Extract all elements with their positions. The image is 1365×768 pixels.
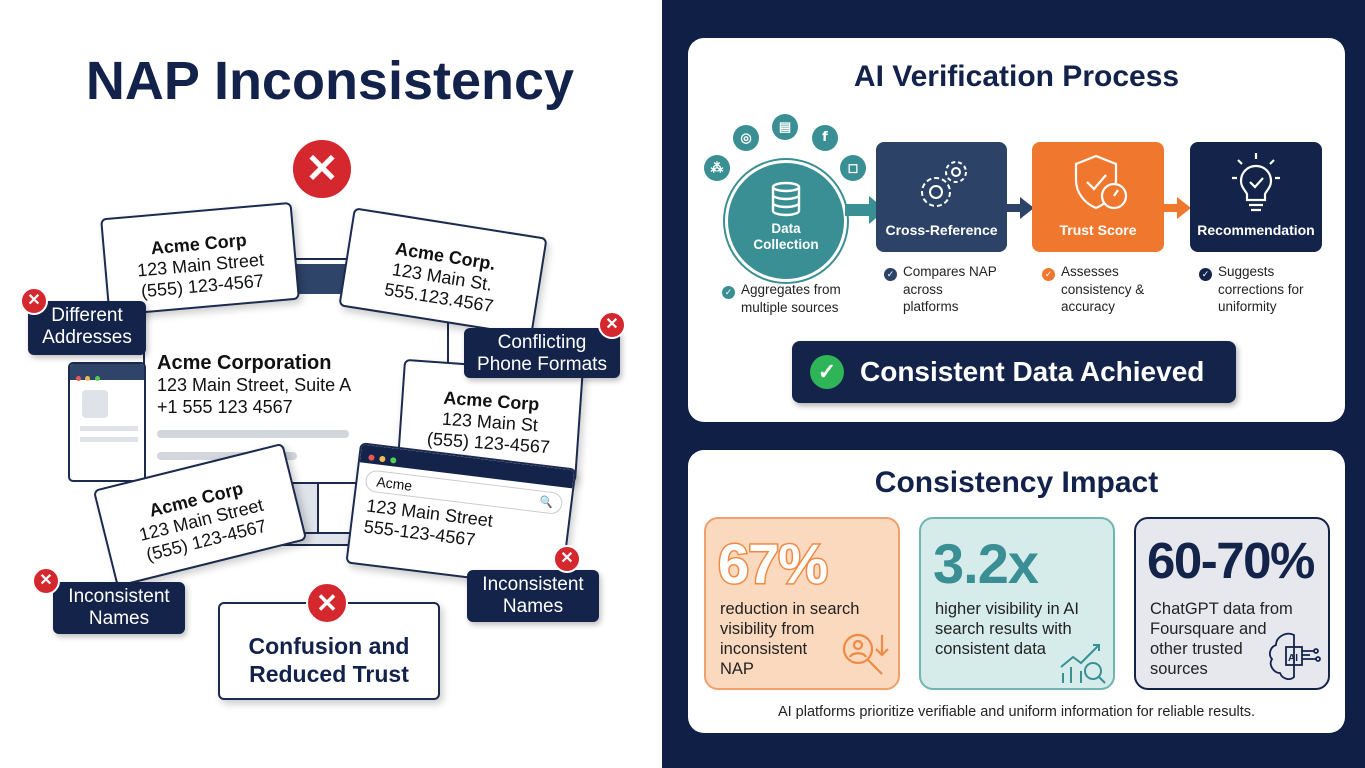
text: ✓ xyxy=(1045,269,1052,279)
text: platforms xyxy=(903,299,959,314)
text: Compares NAP xyxy=(903,264,997,279)
text: main listing in monitor xyxy=(157,352,351,460)
stat: 60-70%: AI xyxy=(1288,653,1298,664)
card: search browser: 555-123-4567 xyxy=(363,516,477,550)
card: Acme Corp mid-right: 123 Main St xyxy=(441,409,539,435)
stat: 60-70%: 60-70% xyxy=(1147,532,1314,589)
text: step bullets: multiple sources xyxy=(741,300,839,315)
text: accuracy xyxy=(1061,299,1115,314)
callout: Confusion and Reduced Trust: Confusion and xyxy=(248,633,409,659)
icon: source icons xyxy=(704,114,866,181)
icon: source icons: ◎ xyxy=(740,130,752,145)
card: search browser: 123 Main Street xyxy=(365,495,494,531)
label: Inconsistent Names left: Inconsistent xyxy=(68,586,170,607)
text: uniformity xyxy=(1218,299,1277,314)
card: Acme Corp. top-right: 123 Main St. xyxy=(391,259,494,295)
label: Inconsistent Names right xyxy=(467,570,599,622)
icon: red x right names xyxy=(553,545,581,573)
card: Acme Corp mid-right xyxy=(396,359,584,483)
banner: Consistent Data Achieved xyxy=(792,341,1236,403)
card: Acme Corp top-left: (555) 123-4567 xyxy=(140,271,265,301)
text: ✓ xyxy=(1202,269,1209,279)
arrow: teal xyxy=(845,196,876,224)
card: Acme Corp top-left xyxy=(100,202,300,316)
stat: 3.2x xyxy=(919,517,1115,690)
step: Data Collection: Data xyxy=(771,221,801,236)
text: ✓ xyxy=(887,269,894,279)
banner: Consistent Data Achieved: Consistent Data Achieved xyxy=(860,356,1204,387)
left browser window xyxy=(68,362,146,482)
card: Acme Corp bottom-left: 123 Main Street xyxy=(137,495,265,545)
stat: 67%: inconsistent xyxy=(720,640,807,658)
text: main listing in monitor: Acme Corporation xyxy=(157,352,331,374)
title: NAP Inconsistency: NAP Inconsistency xyxy=(86,51,574,111)
icon: source icons: ⁂ xyxy=(710,160,724,175)
card: Acme Corp top-left: 123 Main Street xyxy=(136,249,265,280)
icon: source icons: f xyxy=(822,130,828,145)
text: Suggests xyxy=(1218,264,1274,279)
heading: Consistency Impact: Consistency Impact xyxy=(875,466,1158,499)
stat: 3.2x: consistent data xyxy=(935,640,1046,658)
icon: red x Different Addresses xyxy=(20,287,48,315)
label: Different Addresses: Different xyxy=(51,305,123,326)
callout: Confusion and Reduced Trust xyxy=(218,602,440,700)
label: Conflicting Phone Formats xyxy=(464,328,620,378)
icon: top red x xyxy=(291,138,353,200)
icon: source icons: ◻ xyxy=(848,160,858,175)
text: main listing in monitor: +1 555 123 4567 xyxy=(157,397,293,417)
arrow: dark xyxy=(1007,197,1032,219)
label: Inconsistent Names left: Names xyxy=(89,608,149,629)
arrow: orange xyxy=(1164,197,1190,219)
panel: AI Verification Process xyxy=(688,38,1345,422)
stat: 3.2x: search results with xyxy=(935,620,1072,638)
heading: AI Verification Process: AI Verification Process xyxy=(854,60,1179,93)
stat: 60-70%: sources xyxy=(1150,660,1208,678)
icon: red x confusion: ✕ xyxy=(316,588,338,618)
card: search browser xyxy=(345,442,577,590)
card: Acme Corp bottom-left xyxy=(93,443,307,587)
text: across xyxy=(903,282,943,297)
stat: 67%: visibility from xyxy=(720,620,814,638)
label: Inconsistent Names right: Inconsistent xyxy=(482,574,584,595)
text: step bullets: ✓ xyxy=(725,287,732,297)
card: Acme Corp. top-right: 555.123.4567 xyxy=(383,279,495,316)
card: Acme Corp. top-right: Acme Corp. xyxy=(394,238,497,274)
icon: red x right names: ✕ xyxy=(560,550,574,567)
icon: top red x: ✕ xyxy=(305,147,339,191)
label: Different Addresses xyxy=(28,301,146,355)
icon: red x Conflicting xyxy=(598,311,626,339)
step: Trust Score: Trust Score xyxy=(1059,222,1137,238)
stat: 67% xyxy=(704,517,900,690)
panel: Consistency Impact xyxy=(688,450,1345,733)
card: Acme Corp bottom-left: (555) 123-4567 xyxy=(144,516,268,565)
step: Trust Score xyxy=(1032,142,1164,252)
label: Conflicting Phone Formats: Phone Formats xyxy=(477,354,607,375)
card: search browser: Acme xyxy=(376,474,413,494)
card: search browser: 🔍 xyxy=(539,496,554,509)
stat: 67%: reduction in search xyxy=(720,600,859,618)
card: Acme Corp top-left: Acme Corp xyxy=(150,230,247,258)
icon: red x left names xyxy=(32,567,60,595)
label: Inconsistent Names left xyxy=(53,582,185,634)
stat: 60-70%: Foursquare and xyxy=(1150,620,1266,638)
text: Assesses xyxy=(1061,264,1119,279)
monitor illustration xyxy=(143,258,449,546)
icon: red x Different Addresses: ✕ xyxy=(27,292,41,309)
card: Acme Corp mid-right: (555) 123-4567 xyxy=(426,429,551,457)
card: Acme Corp bottom-left: Acme Corp xyxy=(147,478,245,521)
stat: 3.2x: 3.2x xyxy=(933,532,1038,595)
card: Acme Corp mid-right: Acme Corp xyxy=(443,388,540,414)
stat: 60-70% xyxy=(1134,517,1330,690)
step: Cross-Reference xyxy=(876,142,1007,252)
stat: 60-70%: ChatGPT data from xyxy=(1150,600,1293,618)
right navy background xyxy=(662,0,1365,768)
text: main listing in monitor: 123 Main Street, Suite A xyxy=(157,375,351,395)
step: Recommendation: Recommendation xyxy=(1197,222,1315,238)
stat: 67%: NAP xyxy=(720,660,754,678)
stat: 67%: 67% xyxy=(718,532,827,595)
label: Inconsistent Names right: Names xyxy=(503,596,563,617)
text: step bullets: Aggregates from xyxy=(741,282,841,297)
text: corrections for xyxy=(1218,282,1304,297)
text: step bullets xyxy=(722,282,841,315)
card: Acme Corp. top-right xyxy=(338,207,548,337)
footer note: AI platforms prioritize verifiable and uniform information for reliable results. xyxy=(778,704,1255,720)
stat: 3.2x: higher visibility in AI xyxy=(935,600,1079,618)
step: Recommendation xyxy=(1190,142,1322,252)
step: Data Collection xyxy=(725,160,847,282)
icon: source icons: ▤ xyxy=(779,119,791,134)
label: Different Addresses: Addresses xyxy=(42,327,132,348)
callout: Confusion and Reduced Trust: Reduced Trust xyxy=(249,661,409,687)
banner: Consistent Data Achieved: ✓ xyxy=(818,359,836,384)
icon: red x confusion xyxy=(306,582,348,624)
step: Cross-Reference: Cross-Reference xyxy=(885,222,998,238)
icon: red x Conflicting: ✕ xyxy=(605,316,619,333)
stat: 60-70%: other trusted xyxy=(1150,640,1243,658)
label: Conflicting Phone Formats: Conflicting xyxy=(498,332,586,353)
icon: red x left names: ✕ xyxy=(39,572,53,589)
step: Data Collection: Collection xyxy=(753,237,819,252)
text: consistency & xyxy=(1061,282,1144,297)
